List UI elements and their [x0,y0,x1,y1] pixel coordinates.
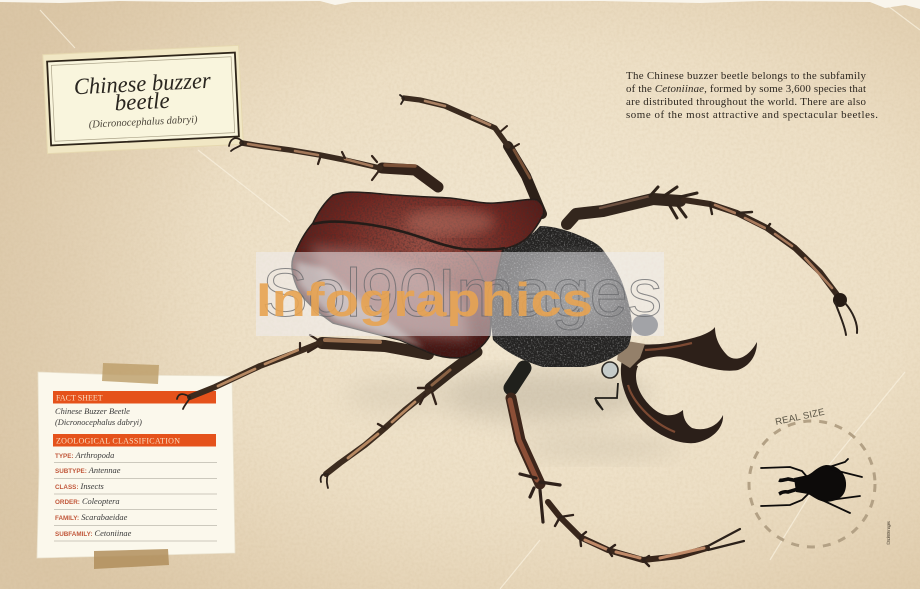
beetle silhouette [761,459,862,513]
intro text [626,70,878,121]
leg: lower centre [321,352,477,488]
watermark orange text: Infographics [256,273,593,326]
title card [43,45,243,154]
classification rows: ORDER: Coleoptera [55,497,120,506]
real size label: REAL SIZE [774,407,826,428]
fact sheet: FACT SHEET [56,394,103,402]
lower mandible [621,360,723,443]
title card: beetle [114,88,170,115]
classification rows: CLASS: Insects [55,482,104,491]
classification rows [54,451,217,541]
real size circle [749,407,875,547]
eye [602,362,618,378]
scientific name: (Dicronocephalus dabryi) [88,114,198,131]
pronotum [491,226,632,367]
watermark panel [256,252,664,336]
intro text: of the Cetoniinae, formed by some 3,600 species that [626,83,866,95]
classification rows: SUBTYPE: Antennae [55,466,121,475]
fact sheet band [53,391,216,404]
antenna [595,383,618,410]
beetle illustration [177,95,857,566]
classification rows: FAMILY: Scarabaeidae [55,513,128,522]
tape top [102,363,159,384]
leg: upper centre [400,95,542,214]
classification band [53,434,216,446]
classification rows: TYPE: Arthropoda [55,451,114,460]
fact sheet [37,363,235,569]
tape bottom [94,549,169,569]
leg: lower right [510,368,744,566]
intro text: The Chinese buzzer beetle belongs to the subfamily [626,70,867,82]
beetle shadow [345,369,680,458]
fact sheet: ZOOLOGICAL CLASSIFICATION [56,436,180,446]
head [617,340,645,368]
leg: upper right [567,187,857,335]
species: Chinese Buzzer Beetle [55,407,130,416]
upper mandible [620,327,757,371]
intro text: are distributed throughout the world. There are also [626,96,867,108]
intro text: some of the most attractive and spectacular beetles. [626,109,878,121]
classification rows: SUBFAMILY: Cetoniinae [55,529,132,538]
fact sheet: (Dicronocephalus dabryi) [55,418,142,427]
head side (under watermark) [632,314,658,336]
card heading: Chinese buzzer [73,68,212,99]
leg: lower left [177,335,428,409]
leg: upper left [229,138,438,187]
watermark outline text: Sol90Images [262,255,662,331]
credit: ©Sol 90 Images [885,520,892,545]
elytra [290,190,546,362]
